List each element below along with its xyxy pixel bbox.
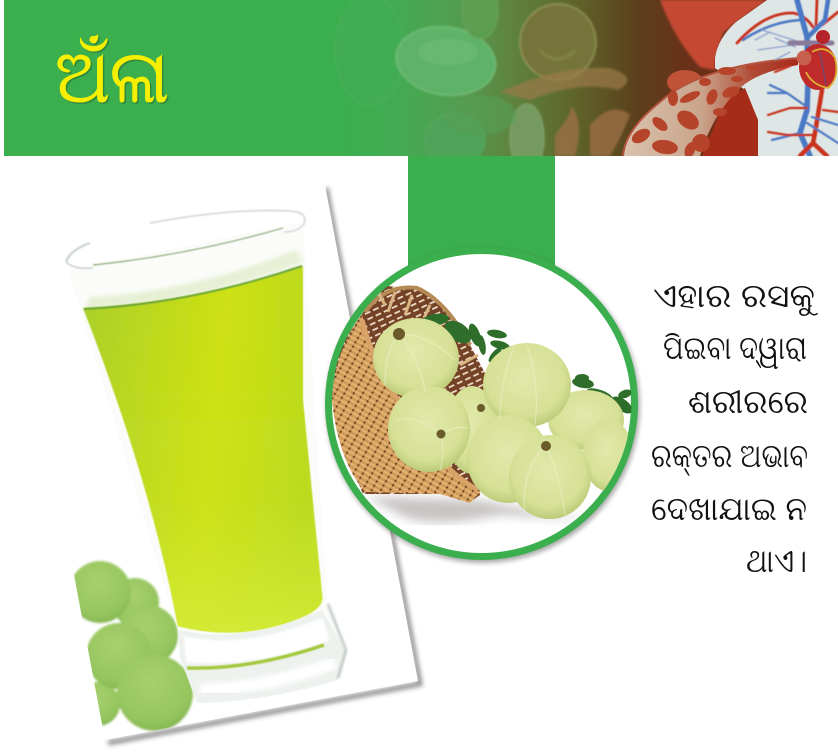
illustration: body background	[715, 0, 838, 156]
glass of juice	[66, 210, 347, 703]
photo card: juice glass	[64, 185, 426, 748]
body text: ଏହାର ରସକୁ	[653, 277, 819, 316]
amla fruits beside the glass	[69, 561, 193, 731]
basket	[332, 286, 486, 503]
fruit ribs	[385, 334, 565, 515]
header banner	[4, 0, 838, 172]
leaves	[420, 312, 635, 417]
body text: ପିଇବା ଦ୍ୱାରା	[663, 329, 807, 369]
illustration: heart	[796, 30, 837, 90]
header photo: blood cells fading into green	[335, 0, 838, 172]
illustration: artery cross-section	[623, 58, 798, 159]
green tab connector	[408, 156, 555, 266]
table shadow	[365, 496, 590, 522]
circular photo: amla in basket	[326, 249, 640, 563]
glass base	[178, 610, 347, 703]
illustration: red tissue	[660, 0, 767, 70]
body text: ଦେଖାଯାଇ ନ	[651, 490, 807, 527]
body text: ରକ୍ତର ଅଭାବ	[651, 437, 808, 476]
body text: ଶରୀରରେ	[688, 383, 808, 420]
amla fruits in basket	[373, 318, 633, 519]
fruit stem marks	[393, 328, 551, 451]
illustration: blood vessels	[737, 0, 838, 156]
body text	[651, 277, 819, 579]
body text: ଥାଏ।	[746, 542, 807, 579]
title: ଅଁଳା	[56, 36, 170, 120]
title: ଅଁଳା	[55, 35, 169, 118]
